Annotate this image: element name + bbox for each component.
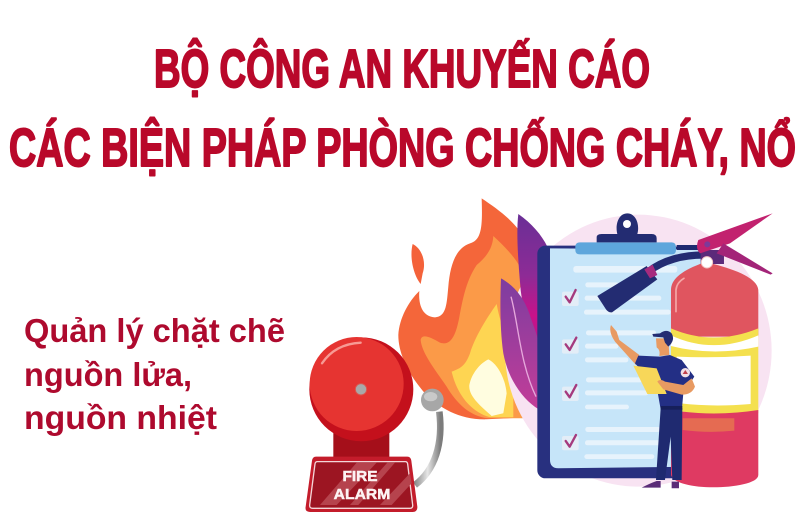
icon: fire alarm bell [306, 337, 444, 512]
subtitle text block [24, 312, 285, 436]
extinguisher hose [648, 255, 703, 272]
alarm label [334, 469, 390, 503]
pink background circle [505, 215, 772, 487]
bell base plate [306, 457, 417, 512]
icon: purple leaves [500, 214, 547, 409]
worker figure [610, 325, 695, 488]
striker arm [415, 412, 440, 485]
bell stem [333, 432, 389, 458]
subtitle text block: Quản lý chặt chẽ [24, 312, 285, 349]
extinguisher neck and handles [701, 250, 724, 264]
illustration: checklist, extinguisher and worker [500, 213, 773, 488]
title [9, 38, 796, 178]
icon: flame [398, 198, 540, 419]
checkboxes [562, 290, 579, 450]
subtitle text block: nguồn nhiệt [24, 399, 217, 436]
clipboard clip [575, 213, 676, 254]
alarm label: FIRE [342, 469, 378, 485]
checklist lines [573, 266, 677, 459]
clipboard [537, 213, 702, 478]
alarm label: ALARM [334, 487, 390, 503]
icon: fire extinguisher [597, 213, 773, 487]
bell dome [309, 337, 413, 441]
subtitle text block: nguồn lửa, [24, 356, 192, 393]
